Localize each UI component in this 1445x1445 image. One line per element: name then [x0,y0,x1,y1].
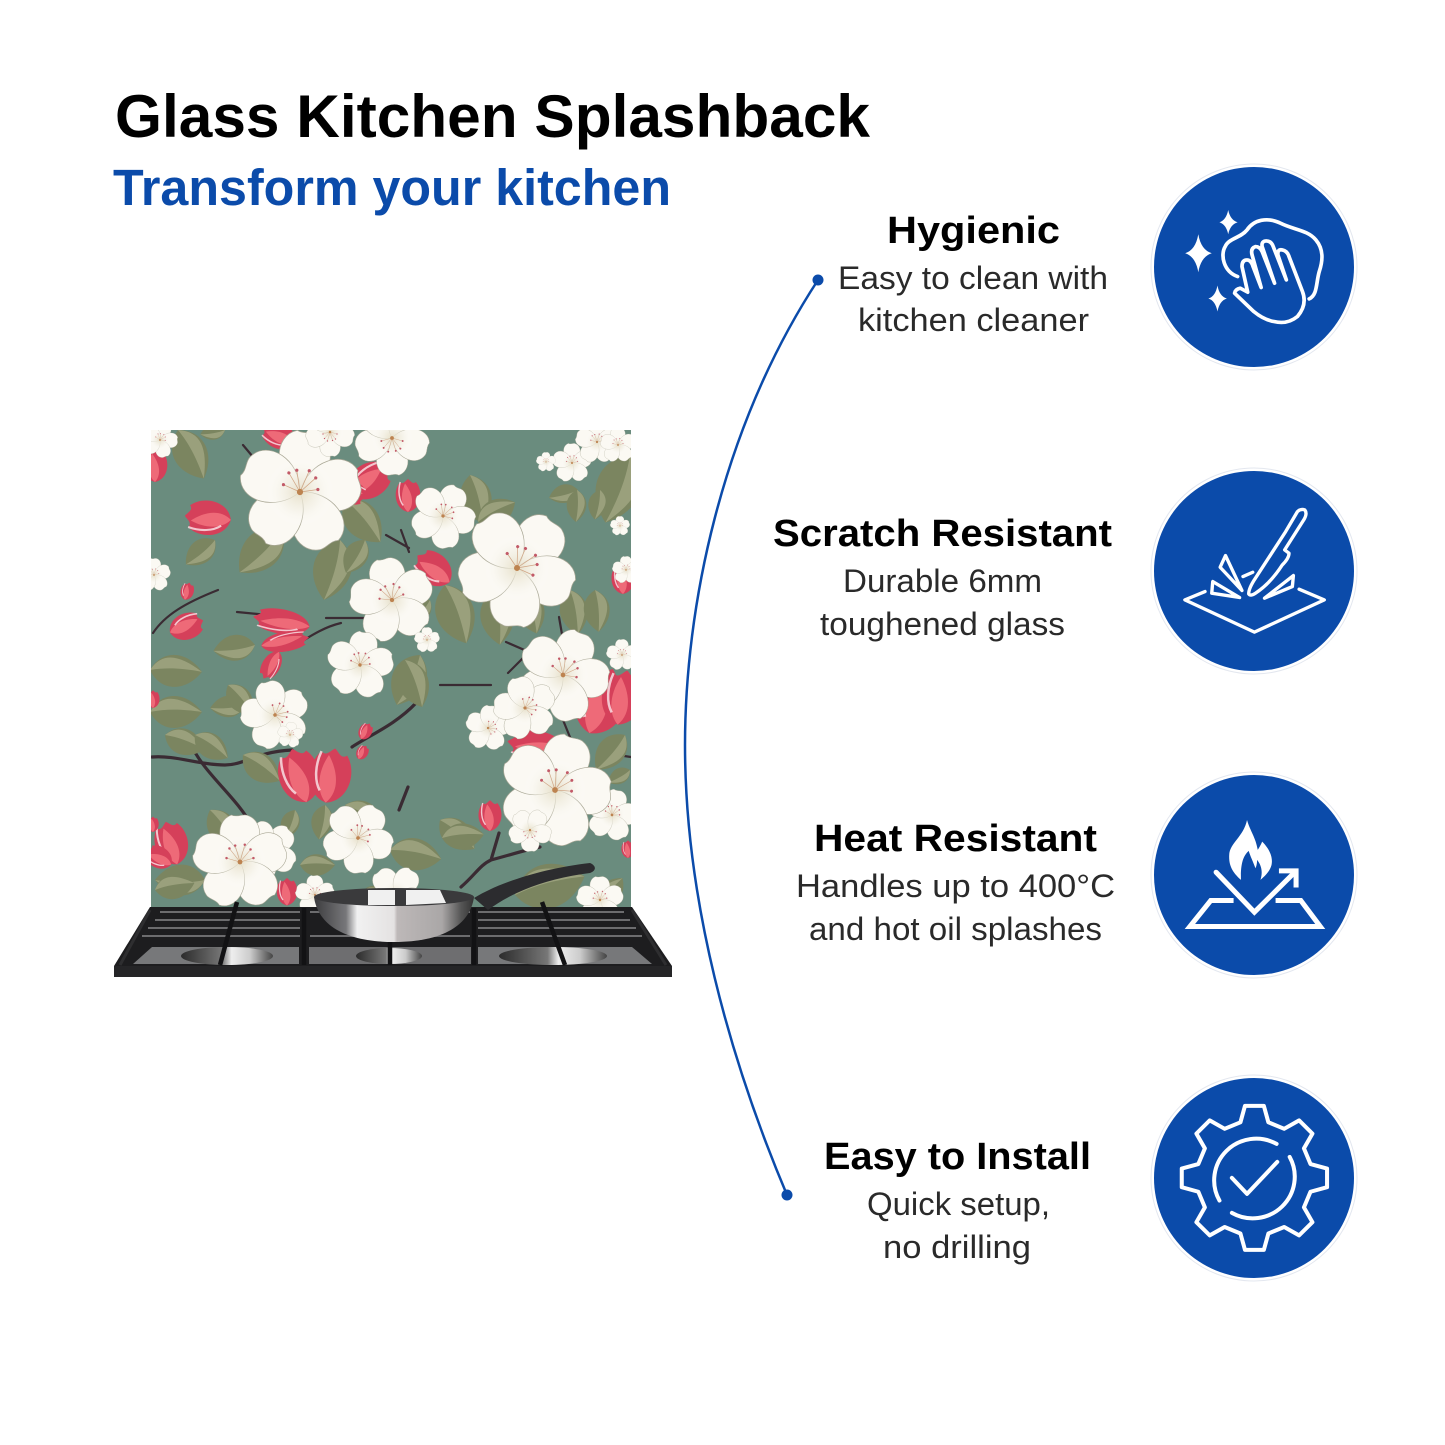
icon: flame over heat arrow [1151,772,1357,978]
frying pan [314,863,595,942]
description: and hot oil splashes [809,911,1102,947]
feature text: easy to install [824,1136,1091,1265]
description [838,260,1108,338]
feature text: scratch resistant [773,513,1112,642]
description: Durable 6mm [843,563,1042,599]
description: Quick setup, [867,1186,1050,1222]
description [867,1186,1050,1265]
description: Easy to clean with [838,260,1108,296]
heading: Hygienic [887,210,1060,252]
product image: floral splashback above hob [114,398,672,977]
description: Handles up to 400°C [796,868,1115,904]
description: kitchen cleaner [858,302,1089,338]
feature text: heat resistant [796,818,1115,947]
icon: gear with check mark [1151,1075,1357,1281]
subtitle: Transform your kitchen [113,159,671,216]
heading: Easy to Install [824,1136,1091,1178]
description [796,868,1115,947]
description: no drilling [883,1229,1031,1265]
heading: Heat Resistant [814,818,1097,860]
panel: floral glass splashback [151,430,631,907]
feature text: hygienic [838,210,1108,338]
description: toughened glass [820,606,1065,642]
heading: Scratch Resistant [773,513,1112,555]
description [820,563,1065,642]
connector curve with end dots [685,274,824,1200]
hob: gas cooktop [114,902,672,977]
title: Glass Kitchen Splashback [115,83,871,150]
icon: knife scratching glass [1151,468,1357,674]
infographic canvas [114,93,1358,1282]
icon: hand wiping with sparkles [1151,164,1357,370]
